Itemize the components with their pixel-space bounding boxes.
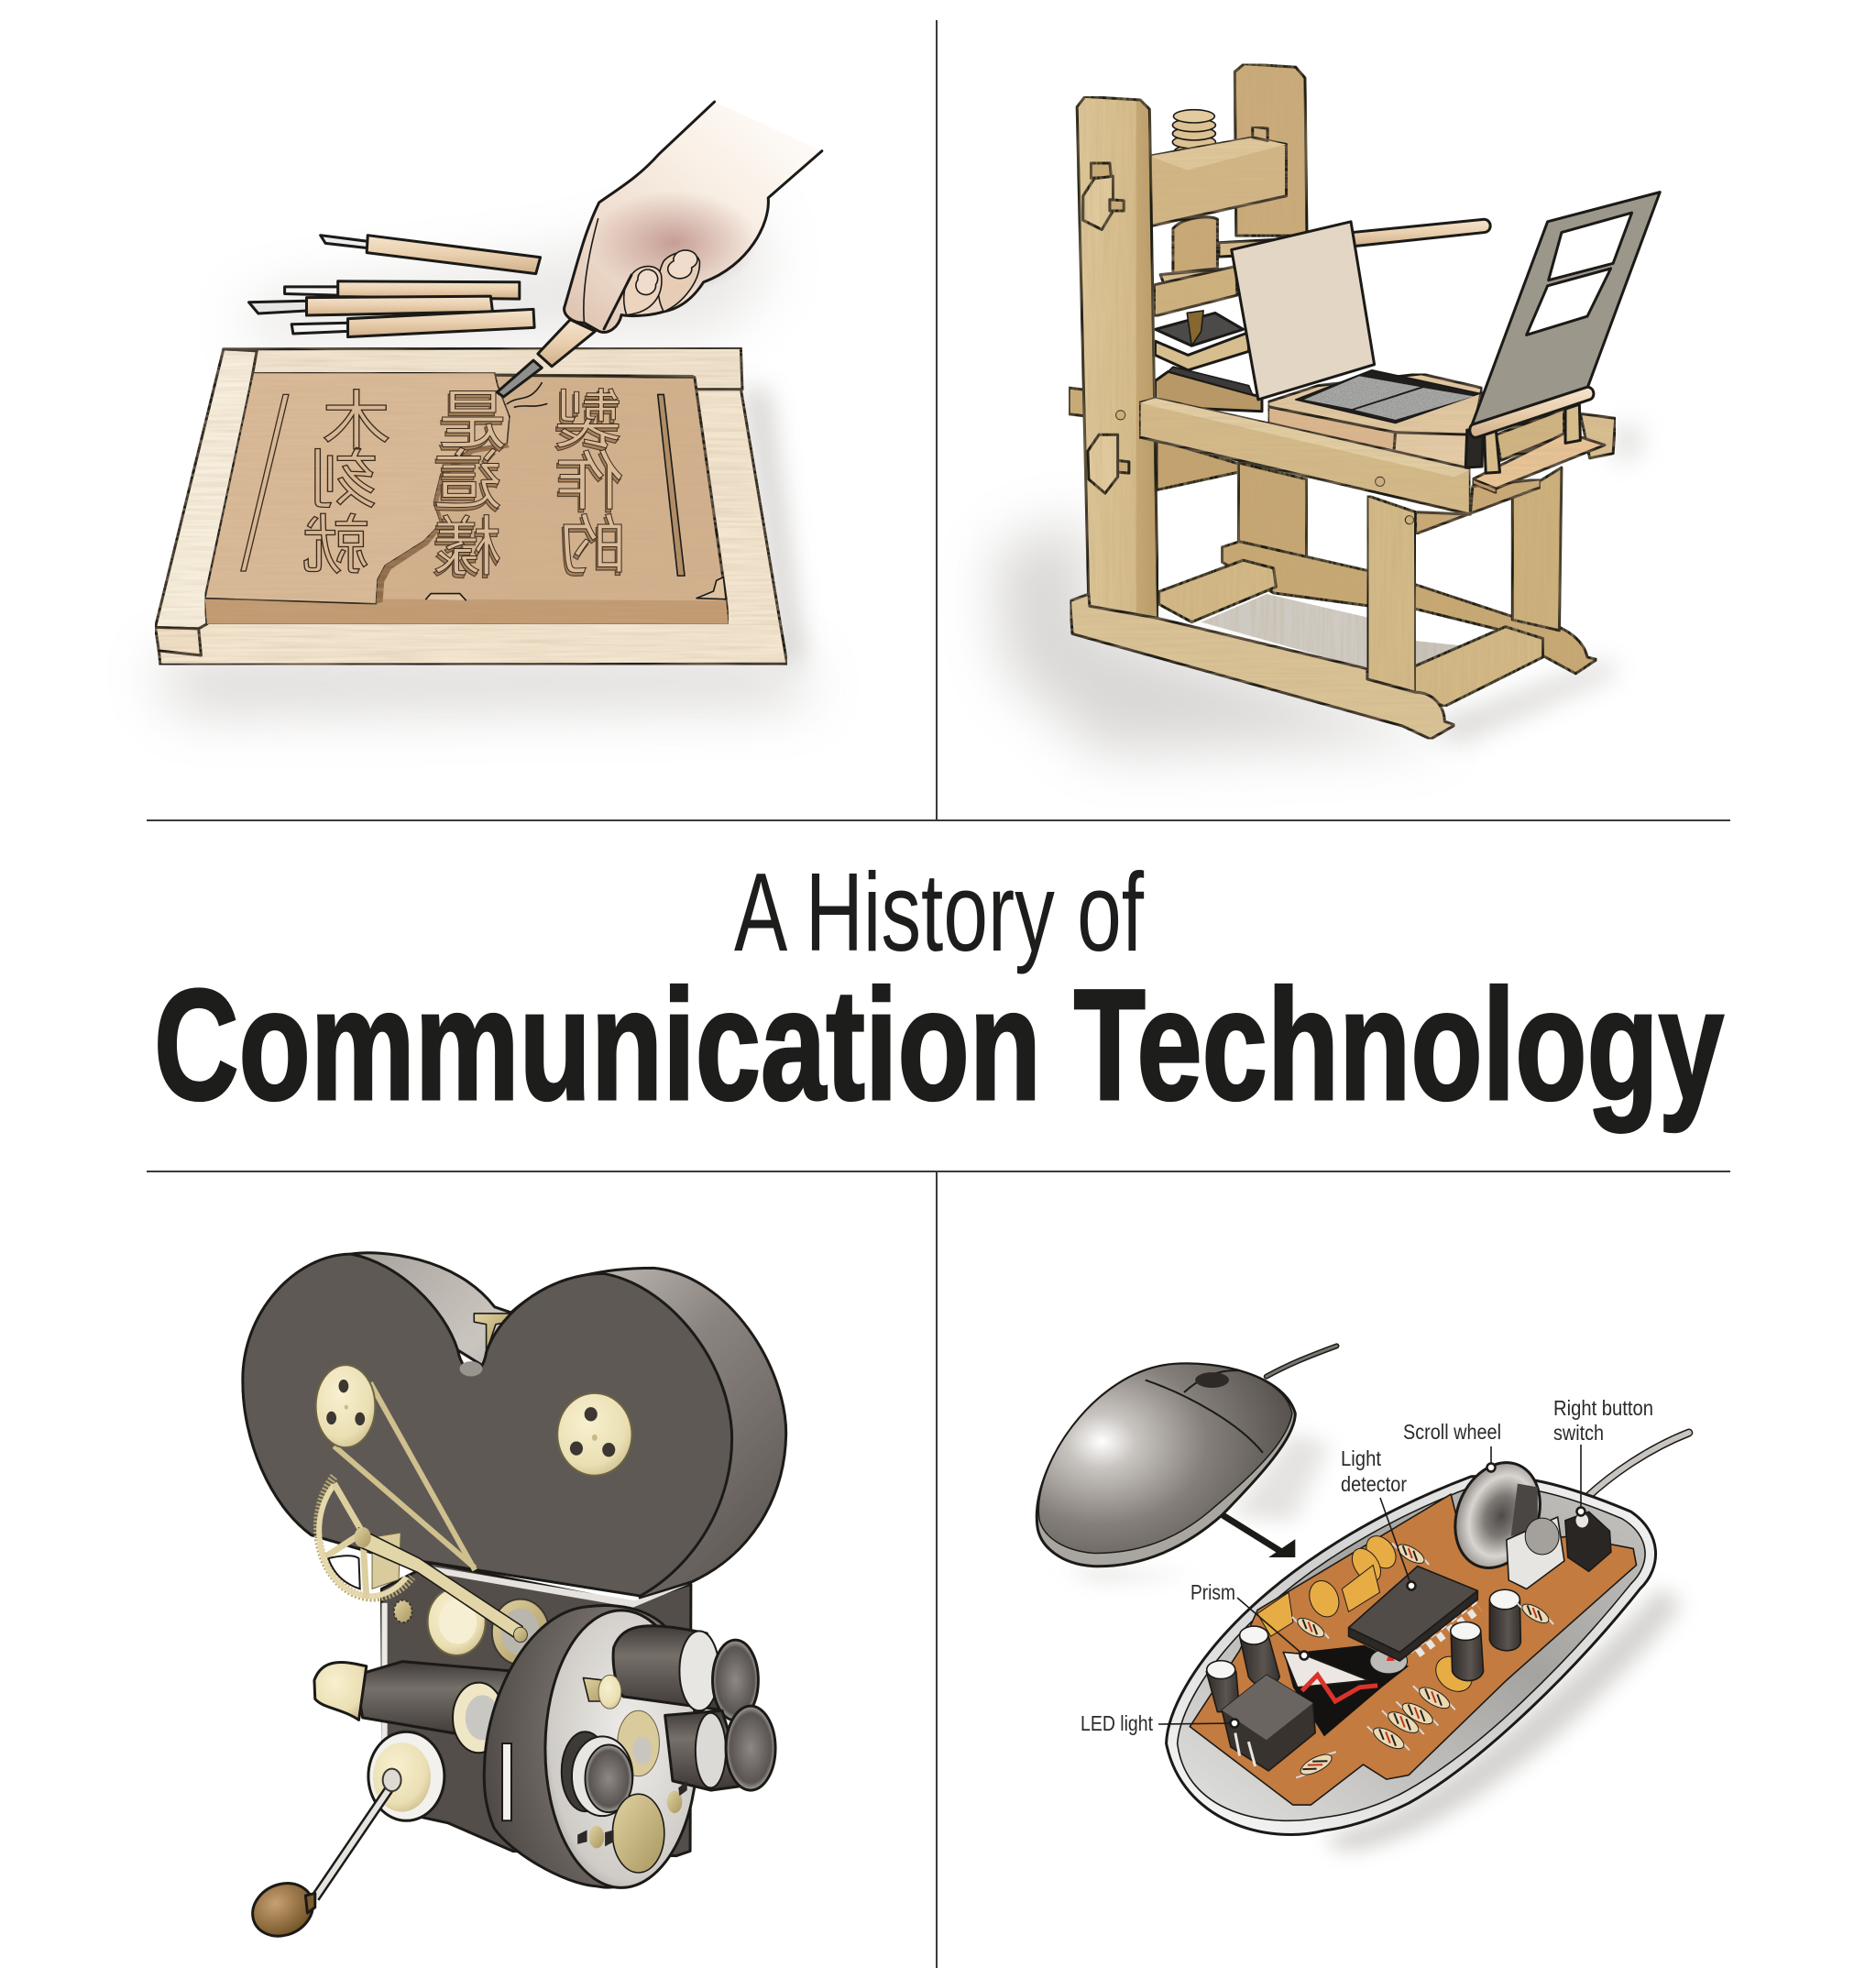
mouse shell [1167, 1476, 1656, 1835]
hand holding the gouge [565, 102, 822, 332]
woodblock soft shadow [157, 204, 808, 710]
cutaway soft shadow [1062, 1431, 1680, 1853]
front lens [562, 1732, 632, 1816]
callout: scroll wheel [1403, 1420, 1501, 1472]
raised relief characters, mirrored: 的 [559, 511, 628, 582]
right button switch [1565, 1512, 1611, 1571]
callout: right button switch: switch [1553, 1421, 1604, 1445]
resistors [1292, 1541, 1553, 1785]
screw thread [1172, 110, 1215, 158]
side rail under the bed [1416, 479, 1541, 534]
integrated circuit chip [1349, 1567, 1480, 1661]
callout: right button switch: Right button [1553, 1396, 1653, 1420]
left upright post with wedges [1069, 96, 1158, 619]
electrolytic capacitors [1206, 1589, 1520, 1712]
callout: light detector [1341, 1446, 1415, 1589]
callout: LED light [1081, 1711, 1239, 1735]
carving gouge in use [497, 320, 595, 397]
lens turret [484, 1606, 697, 1887]
speckled inked forme [1296, 370, 1480, 423]
cylindrical rail [1470, 387, 1594, 437]
circuit board [1190, 1494, 1637, 1805]
raised relief characters, mirrored: 這 [433, 445, 502, 517]
large toothed gear [318, 1477, 412, 1599]
body discs [428, 1588, 549, 1665]
head beam and spindle [1149, 126, 1346, 316]
raised relief characters, mirrored: 這 [432, 448, 500, 521]
raised relief characters, mirrored: 樣 [433, 511, 502, 583]
carved wooden block [205, 372, 729, 624]
brass cap and clips [577, 1781, 687, 1873]
optical sensor cavity with prism and light path [1283, 1645, 1409, 1736]
top right lens [613, 1626, 758, 1721]
magazine top post [474, 1314, 509, 1352]
panel: early film camera illustration [243, 1253, 786, 1942]
raised relief characters, mirrored: 作 [555, 445, 624, 518]
grey frisket frame [1472, 192, 1660, 425]
LED light housing [1222, 1675, 1315, 1771]
callout: LED light: LED light [1081, 1711, 1154, 1735]
callout: right button switch [1553, 1396, 1653, 1516]
front sill and foot [1070, 594, 1454, 739]
brass turret fitting [618, 1710, 659, 1776]
title line one: A History of [734, 850, 1145, 974]
front leg [1367, 496, 1416, 692]
magazine front face [243, 1254, 732, 1596]
front rail [1139, 398, 1470, 514]
linkage arm [355, 1527, 527, 1643]
block character outlines, mirrored [241, 386, 390, 582]
raised relief characters, mirrored: 的 [557, 514, 626, 586]
stopper rail posts [1465, 404, 1580, 473]
camera body box [381, 1563, 691, 1856]
raised relief characters, mirrored: 是 [438, 385, 507, 457]
press handle bar [1352, 219, 1490, 247]
panel: printing press illustration [995, 64, 1660, 753]
film reel left [316, 1365, 375, 1447]
raised relief characters, mirrored: 樣 [432, 515, 500, 587]
scroll wheel [1443, 1457, 1552, 1574]
side tube with brass end [314, 1662, 509, 1739]
arrow from mouse to cutaway [1223, 1515, 1295, 1557]
small pinion gear [394, 1600, 412, 1622]
callout: light detector: detector [1341, 1472, 1407, 1496]
raised relief characters, mirrored: 是 [437, 389, 506, 460]
callout: prism [1190, 1580, 1309, 1659]
carving tools on the table [249, 236, 541, 337]
raised relief characters, mirrored: 製 [553, 389, 621, 460]
press soft shadow [995, 425, 1641, 753]
raised relief characters, mirrored: 作 [554, 449, 623, 522]
film reel right [557, 1393, 632, 1476]
panel: woodblock carving illustration [155, 102, 822, 710]
callout: scroll wheel: Scroll wheel [1403, 1420, 1501, 1444]
yellow capacitors [1257, 1533, 1479, 1696]
mouse exterior [1037, 1364, 1295, 1567]
block character outlines, mirrored: 刻 [310, 445, 378, 516]
block character outlines, mirrored: 就 [302, 510, 371, 582]
rear frame and floor [1157, 64, 1596, 707]
lower right lens [665, 1706, 775, 1790]
drive belts [335, 1383, 475, 1570]
table and side rail [1473, 409, 1616, 493]
film magazine side depth [351, 1253, 786, 1599]
base board and frame [155, 347, 787, 665]
carriage bed [1268, 374, 1482, 467]
block character outlines, mirrored: 木 [322, 386, 390, 458]
linen tympan board [1232, 222, 1375, 400]
raised relief characters, mirrored: 製 [554, 385, 622, 457]
platen and plate [1155, 311, 1262, 412]
callout: light detector: Light [1341, 1446, 1382, 1470]
white disc behind turret [453, 1683, 504, 1753]
callout: prism: Prism [1190, 1580, 1235, 1604]
cables [1267, 1346, 1689, 1498]
scroll encoder bracket [1507, 1517, 1564, 1589]
title block [154, 850, 1724, 1133]
panel: computer mouse cutaway illustration [1037, 1346, 1689, 1853]
hand crank [248, 1732, 444, 1942]
raised relief characters, mirrored [426, 383, 726, 600]
small brass knob [583, 1675, 621, 1709]
